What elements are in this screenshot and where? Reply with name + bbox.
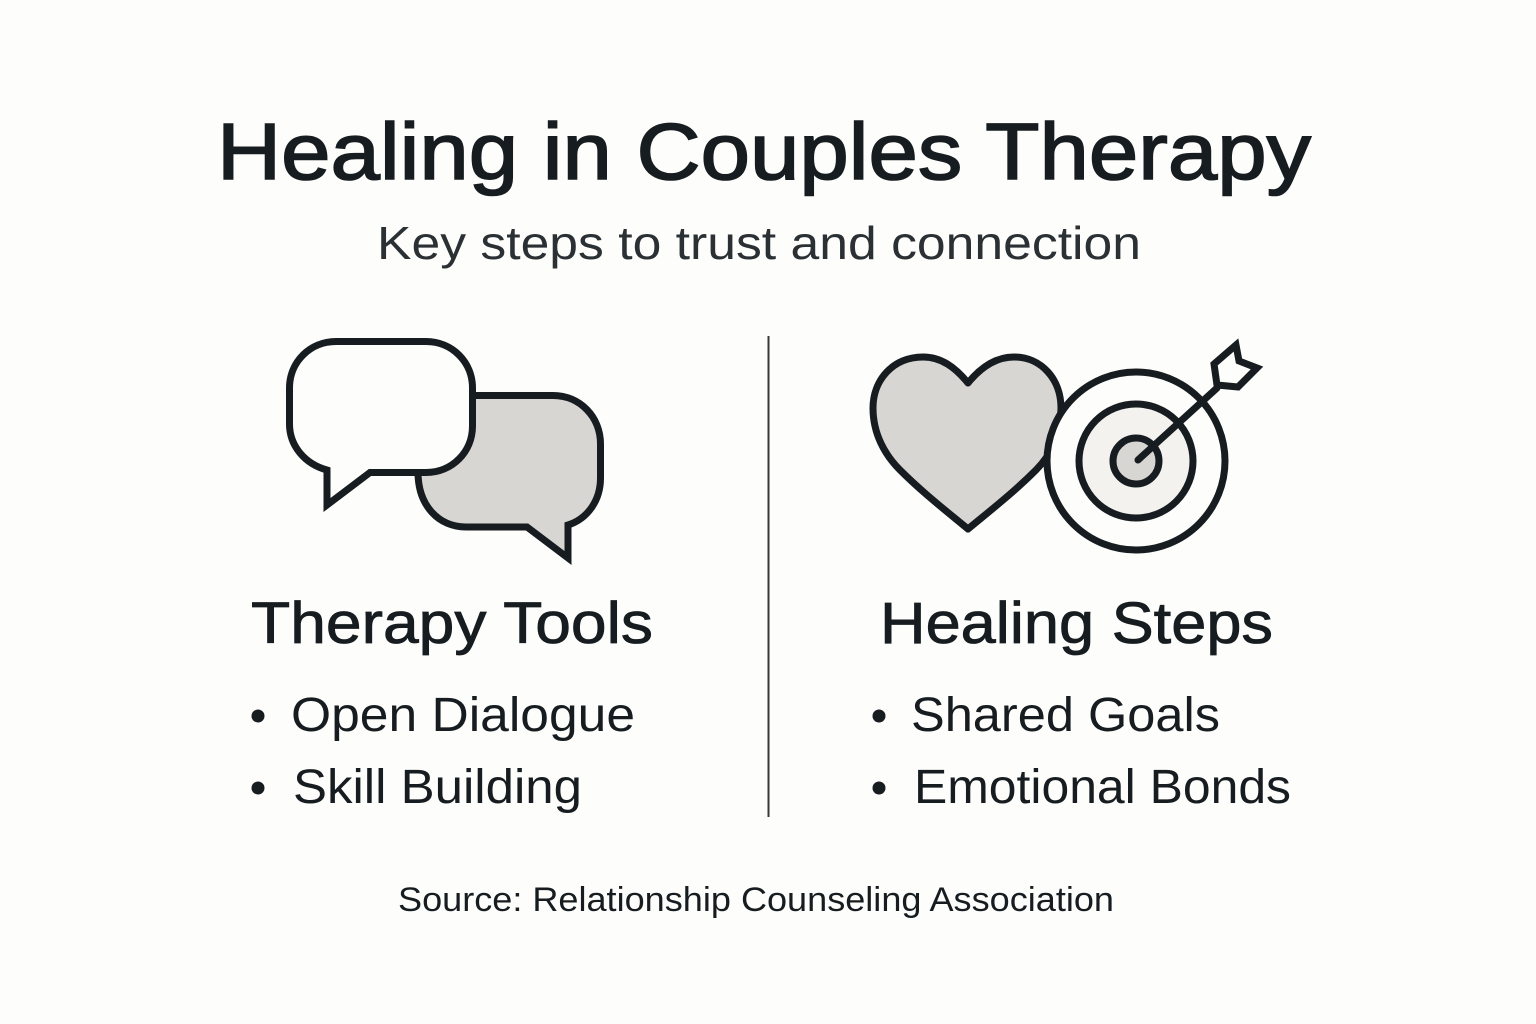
list: healing steps: Emotional Bonds xyxy=(914,761,1291,814)
list: healing steps: Shared Goals xyxy=(911,689,1220,742)
icon: heart and target xyxy=(873,345,1257,550)
panel: therapy tools xyxy=(251,342,653,814)
list: therapy tools: Skill Building xyxy=(293,761,582,814)
heading: healing steps: Healing Steps xyxy=(880,591,1273,656)
subtitle: Key steps to trust and connection xyxy=(377,217,1141,269)
title: Healing in Couples Therapy xyxy=(217,107,1311,196)
heading: therapy tools: Therapy Tools xyxy=(251,591,653,656)
list: healing steps xyxy=(872,689,1291,814)
list: therapy tools: Open Dialogue xyxy=(291,689,635,742)
source note: Source: Relationship Counseling Association xyxy=(398,881,1114,919)
list: therapy tools xyxy=(252,689,635,814)
panel: healing steps xyxy=(872,345,1291,814)
center divider xyxy=(768,336,770,817)
icon: speech bubbles xyxy=(290,342,600,558)
